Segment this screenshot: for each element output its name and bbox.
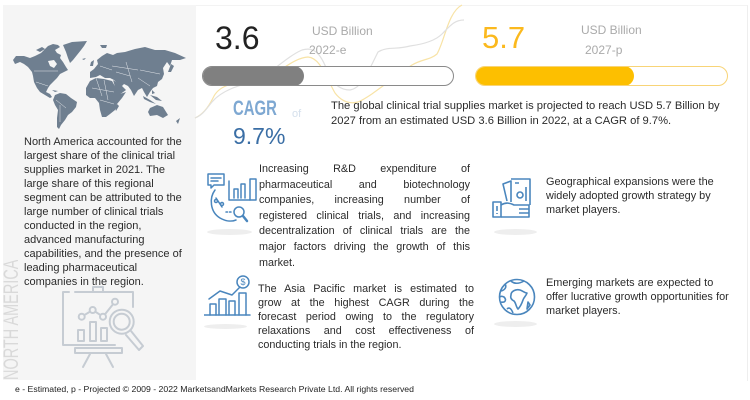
text: north america description: conducted in the region, [24,220,141,232]
panel: north america [3,5,196,380]
icon shadow [494,229,537,235]
text: market summary: 2027 from an estimated USD 3.6 Billion in 2022, at a CAGR of 9.7%. [331,114,671,126]
text: drivers: companies, increasing number of [259,194,470,206]
icon: presentation board with magnifier [62,286,144,368]
icon shadow [207,229,252,235]
icon: globe [498,278,536,316]
text: drivers [259,163,470,269]
text: emerging markets [546,277,729,317]
world map [13,41,186,129]
text: north america description: capabilities, and the presence of [24,248,182,260]
stat: 5.7: 5.7 [482,20,525,55]
icon: analytics [207,173,257,222]
text: emerging markets: offer lucrative growth opportunities for [546,291,729,303]
text: asia pacific: conducting trials in the region. [258,339,401,351]
text: north america description: companies in the region. [24,276,144,288]
text: asia pacific: relaxations and cost effectiveness of [258,325,474,337]
text: asia pacific: The Asia Pacific market is estimated to [258,283,474,295]
text: drivers: pharmaceutical and biotechnology [259,179,470,191]
text: north america description [24,136,182,288]
panel: right edge [196,5,748,381]
text: geographical expansions: market players. [546,204,620,216]
label: USD Billion 2027: USD Billion [581,23,642,37]
stat: 3.6: 3.6 [215,20,259,56]
progress bar: 2027 [475,66,728,86]
label: USD Billion 2022: USD Billion [312,24,373,38]
text: asia pacific: forecast period owing to the regulatory [258,311,474,323]
icon: growth chart with dollar [204,275,251,316]
text: drivers: Increasing R&D expenditure of [259,163,470,175]
progress bar: 2022 [202,66,454,86]
text: geographical expansions [546,176,714,216]
icon: growth chart with dollar: $ [240,277,246,287]
icon shadow [494,321,537,327]
stat: CAGR value: 9.7% [233,123,285,149]
text: north america description: North America accounted for the [24,136,182,148]
text: emerging markets: market players. [546,305,621,317]
text: drivers: major factors driving the growth of this [259,241,470,253]
text: geographical expansions: widely adopted growth strategy by [546,190,711,202]
text: market summary: The global clinical trial supplies market is projected to reach USD 5.7 Billion by [331,100,720,112]
label: 2022-e: 2022-e [309,43,346,57]
text: north america description: large share of this regional [24,178,154,190]
text: north america description: large number of clinical trials [24,206,163,218]
text: drivers: decentralization of clinical trials are the [259,225,470,237]
text: drivers: registered clinical trials, and increasing [259,210,470,222]
text: geographical expansions: Geographical expansions were the [546,176,714,188]
text: north america description: advanced manufacturing [24,234,144,246]
text: north america description: largest share of the clinical trial [24,150,175,162]
text: north america description: leading pharmaceutical [24,262,137,274]
icon: hand with money [492,178,531,218]
text: drivers: market. [259,257,295,269]
text: market summary [331,100,720,126]
text: asia pacific: grow at the highest CAGR during the [258,297,474,309]
icon shadow [204,324,247,329]
label: of: of [292,108,301,120]
text: asia pacific [258,283,474,351]
text: north america description: segment can be attributed to the [24,192,182,204]
footer note: e - Estimated, p - Projected © 2009 - 2022 MarketsandMarkets Research Private Ltd. All rights reserved [15,384,414,394]
label: CAGR: CAGR [233,97,277,120]
label: 2027-p: 2027-p [585,43,622,57]
text: north america description: supplies market in 2021. The [24,164,165,176]
text: emerging markets: Emerging markets are expected to [546,277,713,289]
